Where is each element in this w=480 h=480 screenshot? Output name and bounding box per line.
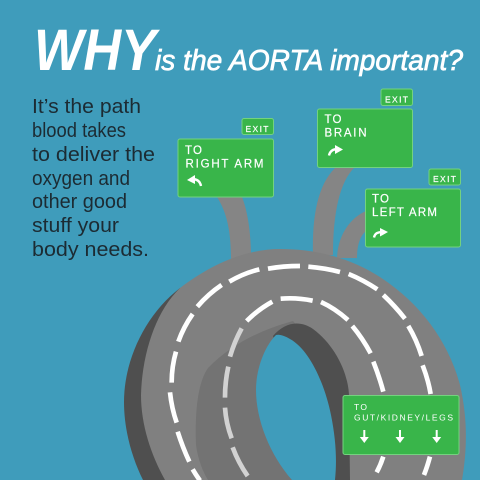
lane dashes bbox=[170, 266, 431, 480]
aortic arch road bbox=[124, 168, 466, 480]
sign: to right arm: EXIT bbox=[246, 124, 268, 134]
sign: to right arm: TO bbox=[185, 145, 202, 157]
body text: It’s the path bbox=[32, 96, 141, 118]
body text: blood takes bbox=[32, 120, 126, 142]
body text: body needs. bbox=[32, 239, 149, 261]
road shadow bbox=[124, 288, 200, 480]
aorta opening bbox=[256, 335, 336, 480]
sign: to brain bbox=[318, 89, 412, 168]
inner road shade bbox=[196, 321, 310, 480]
title bbox=[34, 18, 463, 83]
road surface bbox=[141, 249, 466, 480]
icon: down arrows bbox=[360, 430, 441, 443]
sign: to gut, kidney, legs: GUT/KIDNEY/LEGS bbox=[354, 412, 453, 422]
title: WHY bbox=[34, 18, 161, 83]
sign: to right arm bbox=[178, 118, 274, 197]
body text bbox=[32, 96, 155, 261]
icon: right turn arrow bbox=[329, 145, 343, 156]
body text: other good bbox=[32, 191, 127, 213]
sign: to brain: BRAIN bbox=[324, 128, 366, 140]
sign: to left arm: TO bbox=[372, 194, 389, 206]
inner wall bbox=[273, 324, 350, 480]
sign: to left arm: LEFT ARM bbox=[372, 207, 437, 219]
sign: to brain: TO bbox=[324, 114, 342, 126]
sign: to right arm: RIGHT ARM bbox=[186, 158, 264, 170]
sign: to gut, kidney, legs: TO bbox=[354, 402, 367, 412]
sign: to left arm bbox=[366, 169, 460, 247]
sign: to brain: EXIT bbox=[385, 94, 408, 104]
body text: oxygen and bbox=[32, 168, 130, 190]
sign: to gut, kidney, legs bbox=[343, 396, 459, 454]
artery branches bbox=[217, 168, 366, 260]
icon: left turn arrow bbox=[187, 175, 201, 186]
icon: right turn arrow bbox=[374, 228, 388, 238]
title: is the AORTA important? bbox=[155, 45, 463, 77]
body text: stuff your bbox=[32, 215, 119, 237]
body text: to deliver the bbox=[32, 144, 155, 166]
sign: to left arm: EXIT bbox=[433, 174, 456, 184]
